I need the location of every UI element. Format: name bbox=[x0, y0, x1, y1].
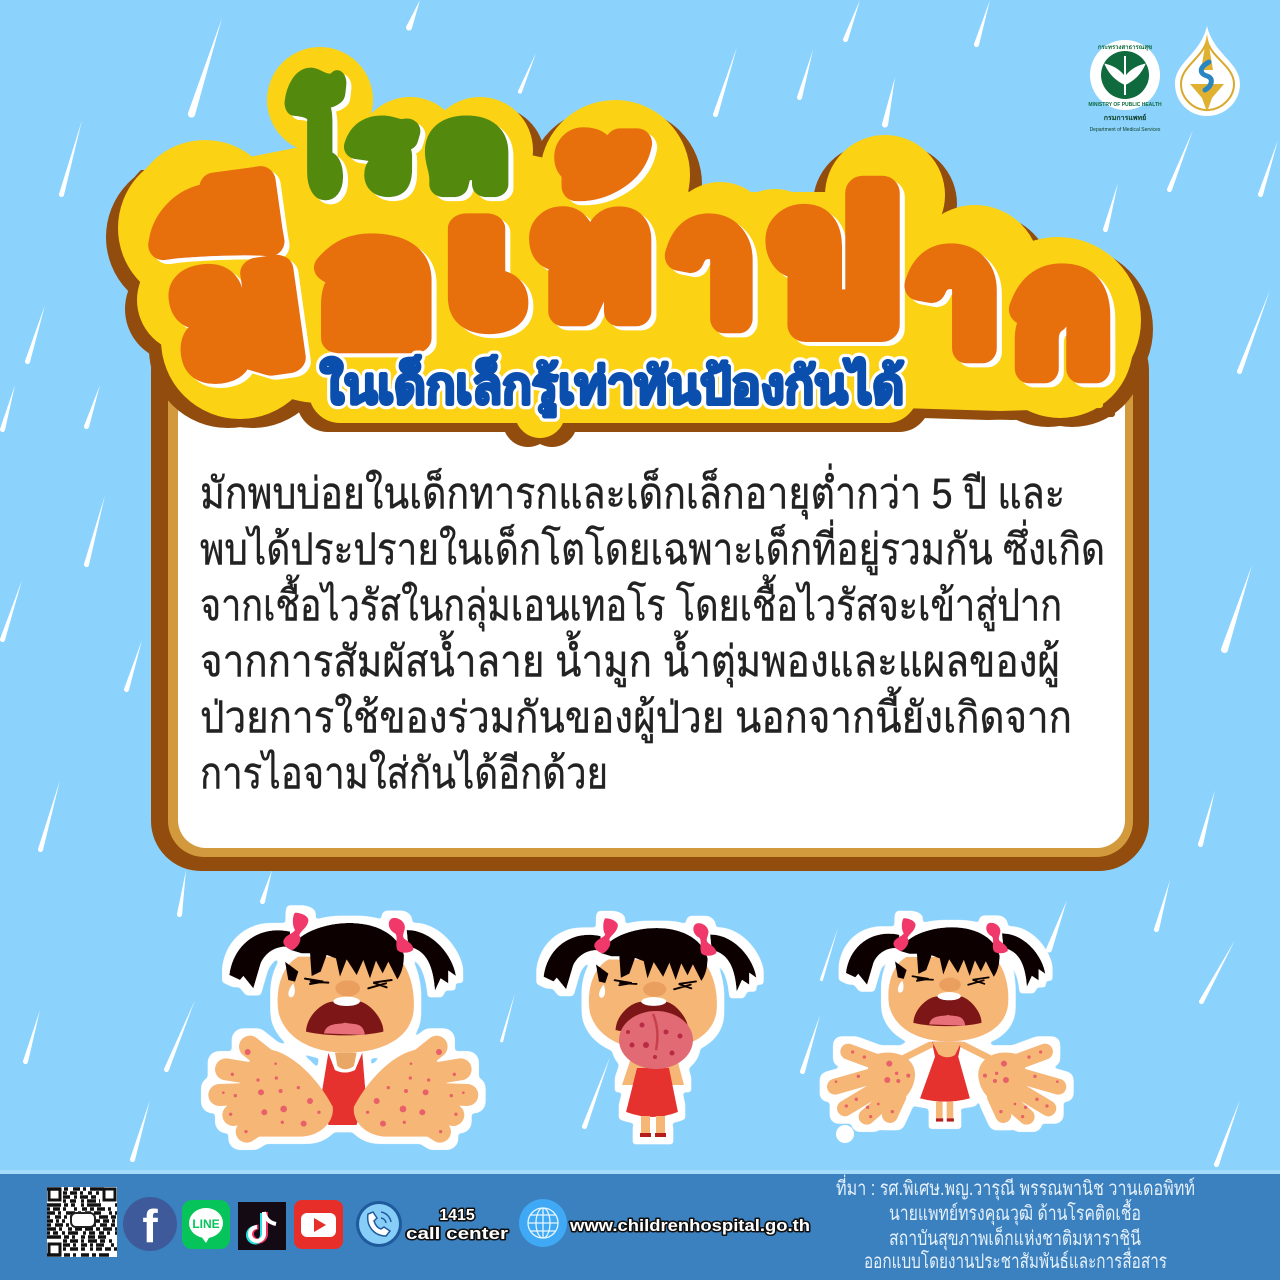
title: มือเท้าปาก: ก bbox=[1018, 229, 1105, 399]
body text bbox=[200, 464, 1105, 798]
drop below girl bbox=[836, 1125, 854, 1143]
title: โรค: โ bbox=[292, 78, 339, 213]
illustration: girl with rash on tongue bbox=[544, 918, 756, 1137]
logo: Ministry of Public Health: Department of Medical Services bbox=[1090, 127, 1161, 133]
title: โรค bbox=[292, 78, 504, 213]
source credits: นายแพทย์ทรงคุณวุฒิ ด้านโรคติดเชื้อ bbox=[889, 1199, 1141, 1226]
panel: content card bbox=[151, 320, 1149, 871]
footer bar bbox=[0, 1170, 1280, 1174]
logo: Ministry of Public Health: MINISTRY OF PUBLIC HEALTH bbox=[1088, 102, 1162, 108]
body text: พบได้ประปรายในเด็กโตโดยเฉพาะเด็กที่อยู่รวมกัน ซึ่งเกิด bbox=[200, 520, 1105, 576]
icon: TikTok bbox=[238, 1202, 286, 1250]
icon: LINE bbox=[182, 1200, 230, 1249]
title: โรค: ค bbox=[430, 94, 504, 206]
title: มือเท้าปาก: ป bbox=[777, 164, 890, 359]
subtitle: ในเด็กเล็กรู้เท่าทันป้องกันได้ bbox=[320, 355, 904, 417]
title: มือเท้าปาก: า bbox=[912, 209, 994, 379]
logo: Ministry of Public Health bbox=[1088, 40, 1162, 133]
logo: Queen Sirikit institute bbox=[1175, 26, 1240, 116]
title: โรค: ร bbox=[352, 94, 410, 206]
source credits: ที่มา : รศ.พิเศษ.พญ.วารุณี พรรณพานิช วานเดอพิทท์ bbox=[836, 1174, 1195, 1201]
call center text: 1415 bbox=[439, 1207, 475, 1224]
icon: Facebook: f bbox=[142, 1200, 158, 1252]
title: มือเท้าปาก: อ bbox=[322, 199, 427, 369]
title: มือเท้าปาก: ้ bbox=[568, 142, 637, 362]
title: มือเท้าปาก: ื bbox=[155, 169, 310, 429]
body text: ป่วยการใช้ของร่วมกันของผู้ป่วย นอกจากนี้ยังเกิดจาก bbox=[200, 686, 1072, 744]
source credits bbox=[836, 1174, 1195, 1273]
subtitle: ในเด็กเล็กรู้เท่าทันป้องกันได้ bbox=[320, 355, 904, 417]
icon: call center phone bbox=[356, 1201, 402, 1247]
call center text: call center bbox=[406, 1224, 508, 1243]
title: มือเท้าปาก bbox=[155, 142, 1105, 429]
icon: YouTube bbox=[294, 1200, 343, 1249]
icon: LINE: LINE bbox=[192, 1217, 220, 1231]
illustration: girl with rash on spread hands bbox=[835, 918, 1059, 1122]
title: มือเท้าปาก: ท bbox=[542, 172, 644, 342]
icon: globe bbox=[519, 1199, 567, 1247]
body text: จากการสัมผัสน้ำลาย น้ำมูก น้ำตุ่มพองและแผลของผู้ bbox=[200, 630, 1060, 688]
body text: มักพบบ่อยในเด็กทารกและเด็กเล็กอายุต่ำกว่า 5 ปี และ bbox=[200, 464, 1065, 520]
call center text bbox=[406, 1207, 508, 1243]
title: มือเท้าปาก: ม bbox=[169, 218, 307, 403]
source credits: สถาบันสุขภาพเด็กแห่งชาติมหาราชินี bbox=[889, 1225, 1141, 1251]
illustration: girl with rash on hands (palms forward) bbox=[219, 913, 467, 1137]
QR code bbox=[47, 1187, 117, 1257]
title: มือเท้าปาก: เ bbox=[454, 179, 518, 349]
logo: Ministry of Public Health: กรมการแพทย์ bbox=[1104, 113, 1146, 122]
body text: จากเชื้อไวรัสในกลุ่มเอนเทอโร โดยเชื้อไวรัสจะเข้าสู่ปาก bbox=[200, 574, 1062, 632]
logo: Ministry of Public Health: กระทรวงสาธารณสุข bbox=[1098, 44, 1152, 51]
body text: การไอจามใส่กันได้อีกด้วย bbox=[200, 749, 608, 798]
title: มือเท้าปาก: า bbox=[672, 179, 750, 349]
title badge: yellow blob with brown shadow bbox=[109, 50, 1150, 444]
website: www.childrenhospital.go.th bbox=[569, 1216, 810, 1235]
icon: Facebook bbox=[123, 1197, 177, 1252]
source credits: ออกแบบโดยงานประชาสัมพันธ์และการสื่อสาร bbox=[864, 1247, 1167, 1273]
